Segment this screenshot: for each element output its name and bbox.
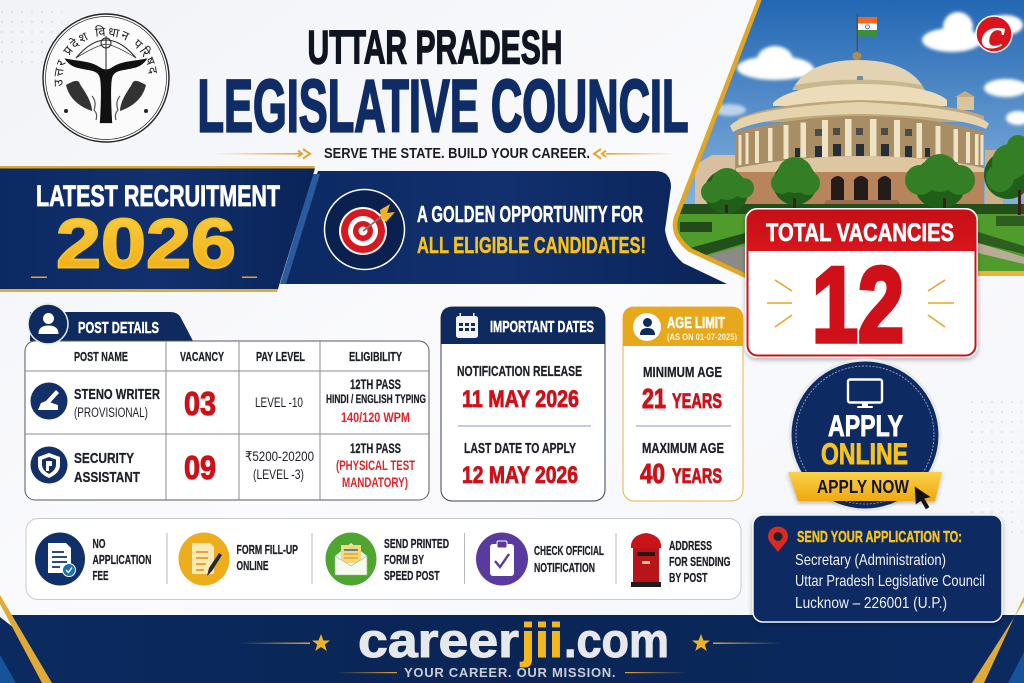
panel: age limit: YEARS	[672, 390, 722, 413]
tagline with arrows	[213, 145, 676, 162]
banner text: A GOLDEN OPPORTUNITY FOR	[417, 201, 643, 227]
icon: person	[633, 313, 661, 341]
star right	[692, 634, 710, 651]
item: send printed form by speed post: SPEED POST	[384, 569, 440, 583]
table: PAY LEVEL	[256, 349, 305, 364]
panel: important dates: 11 MAY 2026	[462, 386, 579, 413]
table: POST NAME	[74, 349, 128, 364]
item: address for sending by post: ADDRESS	[669, 539, 712, 553]
panel: total vacancies: 12	[812, 244, 904, 364]
banner: latest recruitment 2026	[0, 166, 315, 292]
icon: post box	[631, 533, 661, 587]
banner: golden opportunity	[280, 171, 727, 284]
row: security assistant: 09	[184, 449, 216, 486]
row: steno writer: LEVEL -10	[255, 395, 303, 410]
title	[198, 20, 688, 148]
flag	[852, 13, 877, 60]
row: security assistant: 12TH PASS	[350, 441, 401, 456]
item: check official notification: CHECK OFFICIAL	[534, 544, 604, 558]
icon: calendar	[456, 313, 478, 338]
banner: latest recruitment 2026: LATEST RECRUITMENT	[36, 180, 280, 213]
columns	[738, 119, 984, 165]
item: form fill-up online	[178, 532, 298, 586]
dome	[795, 60, 922, 85]
icon: clipboard check	[476, 532, 528, 586]
banner text: ALL ELIGIBLE CANDIDATES!	[417, 232, 646, 258]
item: form fill-up online: FORM FILL-UP	[236, 543, 298, 557]
apply online badge	[788, 360, 942, 510]
icon: writing hand	[30, 382, 68, 420]
panel: address	[753, 515, 1002, 622]
item: send printed form by speed post	[326, 532, 449, 586]
sunburst rays	[767, 280, 954, 327]
wall behind colonnade	[736, 116, 984, 170]
roof balustrade	[738, 100, 984, 122]
icon: user badge	[28, 304, 68, 344]
tab heading: POST DETAILS	[78, 320, 159, 337]
brand name: career	[358, 615, 519, 668]
panel: age limit: 21	[642, 383, 666, 414]
item: no application fee: APPLICATION	[92, 553, 152, 567]
icon: document	[35, 532, 85, 586]
panel: age limit	[623, 307, 743, 501]
item: no application fee	[35, 532, 152, 586]
panel: important dates	[441, 307, 605, 501]
seal emblem	[64, 36, 148, 122]
item: send printed form by speed post: FORM BY	[384, 553, 424, 567]
row: steno writer: STENO WRITER	[74, 386, 160, 403]
icon: target with arrow	[324, 190, 404, 270]
panel: important dates: 12 MAY 2026	[462, 462, 578, 489]
row: steno writer: 140/120 WPM	[341, 410, 410, 425]
row: steno writer: HINDI / ENGLISH TYPING	[326, 394, 426, 406]
panel: how to apply strip	[26, 518, 741, 600]
row: security assistant: (LEVEL -3)	[253, 467, 304, 482]
banner text	[417, 201, 646, 258]
icon: monitor	[848, 380, 882, 408]
panel: address: Lucknow – 226001 (U.P.)	[795, 595, 947, 612]
row: steno writer: (PROVISIONAL)	[74, 405, 148, 420]
button: apply now: APPLY NOW	[817, 476, 909, 497]
item: address for sending by post: BY POST	[669, 571, 708, 585]
icon: form and pen	[178, 532, 230, 586]
panel: age limit: AGE LIMIT	[667, 315, 725, 332]
item: check official notification	[476, 532, 604, 586]
row: security assistant	[30, 441, 416, 490]
panel: age limit: YEARS	[672, 465, 722, 488]
item: form fill-up online: ONLINE	[236, 559, 268, 573]
panel: post details	[25, 304, 429, 500]
row: security assistant: SECURITY	[74, 450, 134, 467]
gold photo border	[675, 0, 760, 276]
brand name: .com	[564, 615, 669, 668]
clouds	[714, 12, 1024, 125]
row: security assistant: ASSISTANT	[74, 469, 140, 486]
sandstone base	[738, 172, 984, 207]
entablature	[730, 102, 989, 132]
watermark logo	[976, 12, 1012, 58]
apply online badge: ONLINE	[821, 438, 908, 471]
brand name: jii	[520, 615, 563, 668]
panel: age limit: (AS ON 01-07-2025)	[667, 332, 737, 343]
icon: envelope	[326, 532, 376, 586]
distant buildings	[695, 155, 735, 205]
balustrade base	[736, 156, 984, 172]
table: ELIGIBILITY	[349, 349, 402, 364]
panel: age limit: MAXIMUM AGE	[642, 441, 724, 457]
panel: address: SEND YOUR APPLICATION TO:	[797, 529, 962, 546]
footer	[0, 595, 1024, 683]
item: send printed form by speed post: SEND PRINTED	[384, 537, 449, 551]
ground	[677, 214, 1024, 273]
windows	[795, 128, 930, 157]
item: no application fee: FEE	[92, 569, 108, 583]
button: apply now	[788, 472, 942, 501]
item: no application fee: NO	[92, 537, 106, 551]
table	[25, 341, 429, 500]
item: address for sending by post: FOR SENDING	[669, 555, 730, 569]
row: security assistant: ₹5200-20200	[245, 449, 314, 464]
photo: parliament building	[670, 0, 1024, 280]
row: steno writer: 12TH PASS	[350, 377, 401, 392]
item: address for sending by post	[631, 533, 730, 587]
icon: location pin	[768, 526, 788, 552]
watermark logo: c	[981, 12, 1006, 58]
row: security assistant: (PHYSICAL TEST	[336, 458, 416, 473]
banner: latest recruitment 2026: 2026	[56, 204, 236, 282]
panel: important dates: NOTIFICATION RELEASE	[457, 364, 582, 380]
panel: age limit: 40	[640, 458, 665, 489]
row: steno writer	[30, 377, 426, 425]
panel: address: Secretary (Administration)	[795, 552, 946, 569]
icon: cursor	[915, 487, 930, 509]
logo: legislative council seal	[42, 13, 170, 143]
seal text: उत्तर प्रदेश विधान परिषद	[54, 25, 157, 86]
row: steno writer: 03	[184, 385, 216, 422]
trees	[704, 151, 1024, 214]
footer tagline: YOUR CAREER. OUR MISSION.	[404, 665, 616, 680]
brand name	[358, 615, 669, 668]
tab heading	[30, 312, 193, 341]
title: LEGISLATIVE COUNCIL	[198, 64, 688, 148]
apply online badge: APPLY	[828, 410, 903, 443]
panel: total vacancies	[745, 208, 978, 364]
icon: shield	[30, 446, 68, 484]
tagline with arrows: SERVE THE STATE. BUILD YOUR CAREER.	[324, 145, 590, 162]
panel: total vacancies: TOTAL VACANCIES	[766, 219, 954, 247]
title: UTTAR PRADESH	[308, 20, 562, 74]
item: check official notification: NOTIFICATION	[534, 561, 595, 575]
star left	[312, 634, 330, 651]
row: security assistant: MANDATORY)	[342, 475, 408, 490]
panel: important dates: IMPORTANT DATES	[490, 319, 594, 336]
panel: age limit: MINIMUM AGE	[643, 365, 722, 381]
panel: important dates: LAST DATE TO APPLY	[464, 441, 576, 457]
table: VACANCY	[180, 349, 224, 364]
